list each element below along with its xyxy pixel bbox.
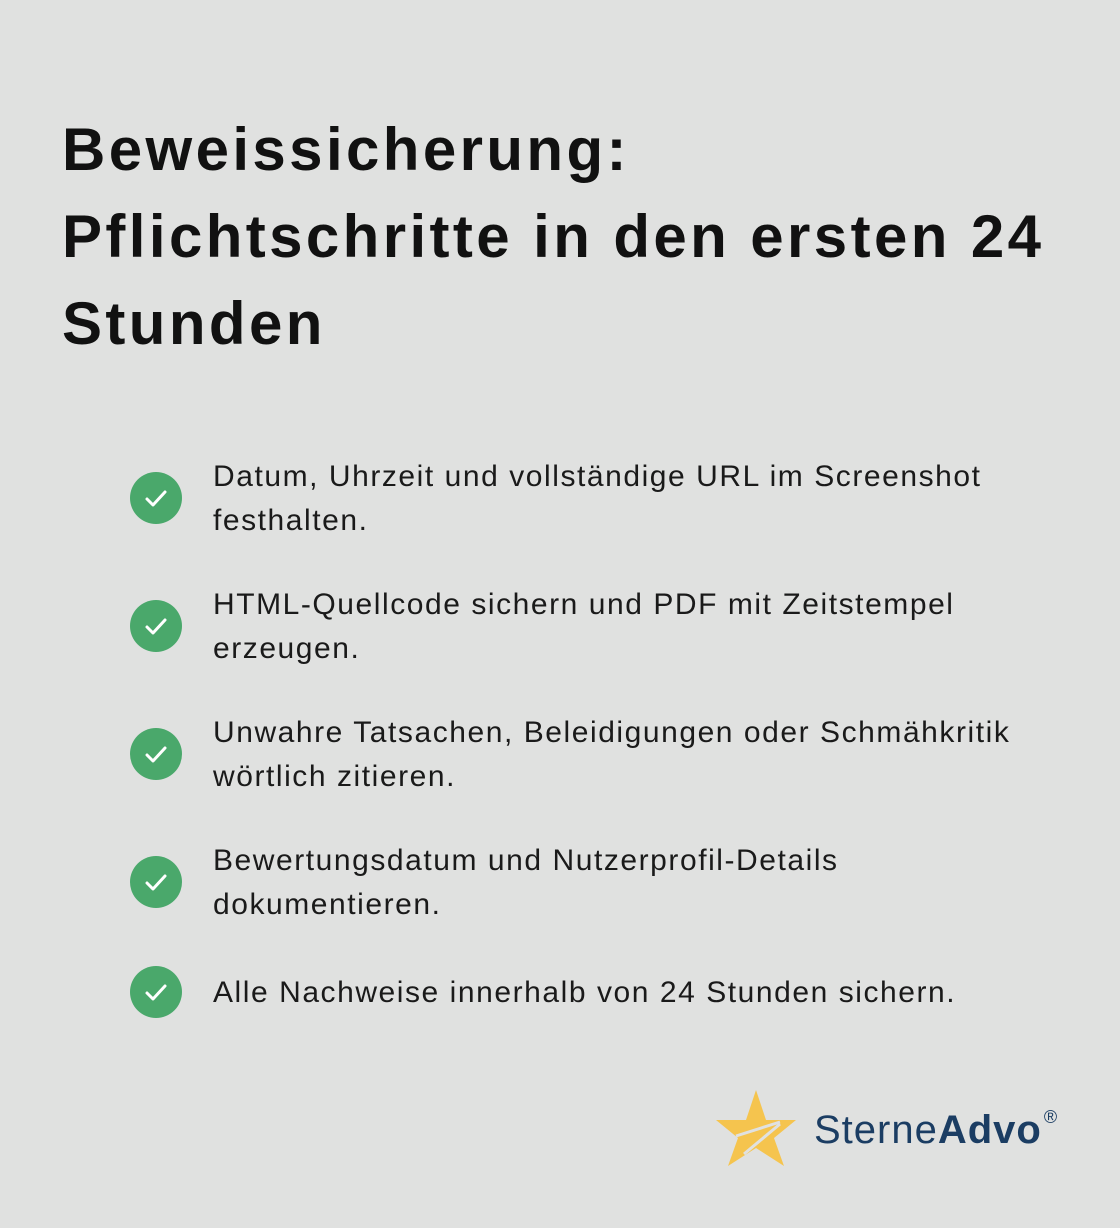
text: [213, 588, 955, 665]
brand name: SterneAdvo®: [814, 1107, 1058, 1152]
text: Alle Nachweise innerhalb von 24 Stunden sichern.: [213, 976, 956, 1009]
item 4: [130, 844, 839, 921]
item 3: [130, 716, 1010, 793]
icon: check: [130, 600, 182, 652]
text: festhalten.: [213, 504, 368, 537]
item 2: [130, 588, 955, 665]
title: Beweissicherung:: [62, 116, 630, 183]
icon: check: [130, 728, 182, 780]
icon: check: [130, 966, 182, 1018]
text: dokumentieren.: [213, 888, 442, 921]
text: erzeugen.: [213, 632, 360, 665]
text: wörtlich zitieren.: [213, 760, 456, 793]
title: Pflichtschritte in den ersten 24: [62, 203, 1044, 270]
text: [213, 716, 1010, 793]
logo: [716, 1090, 1058, 1166]
text: Unwahre Tatsachen, Beleidigungen oder Schmähkritik: [213, 716, 1010, 749]
title: Stunden: [62, 290, 326, 357]
text: [213, 844, 839, 921]
text: Datum, Uhrzeit und vollständige URL im Screenshot: [213, 460, 981, 493]
icon: check: [130, 856, 182, 908]
item 1: [130, 460, 981, 537]
text: HTML-Quellcode sichern und PDF mit Zeitstempel: [213, 588, 955, 621]
text: [213, 460, 981, 537]
icon: check: [130, 472, 182, 524]
icon: star: [716, 1090, 796, 1166]
title: [62, 116, 1044, 357]
text: Bewertungsdatum und Nutzerprofil-Details: [213, 844, 839, 877]
item 5: [130, 966, 956, 1018]
